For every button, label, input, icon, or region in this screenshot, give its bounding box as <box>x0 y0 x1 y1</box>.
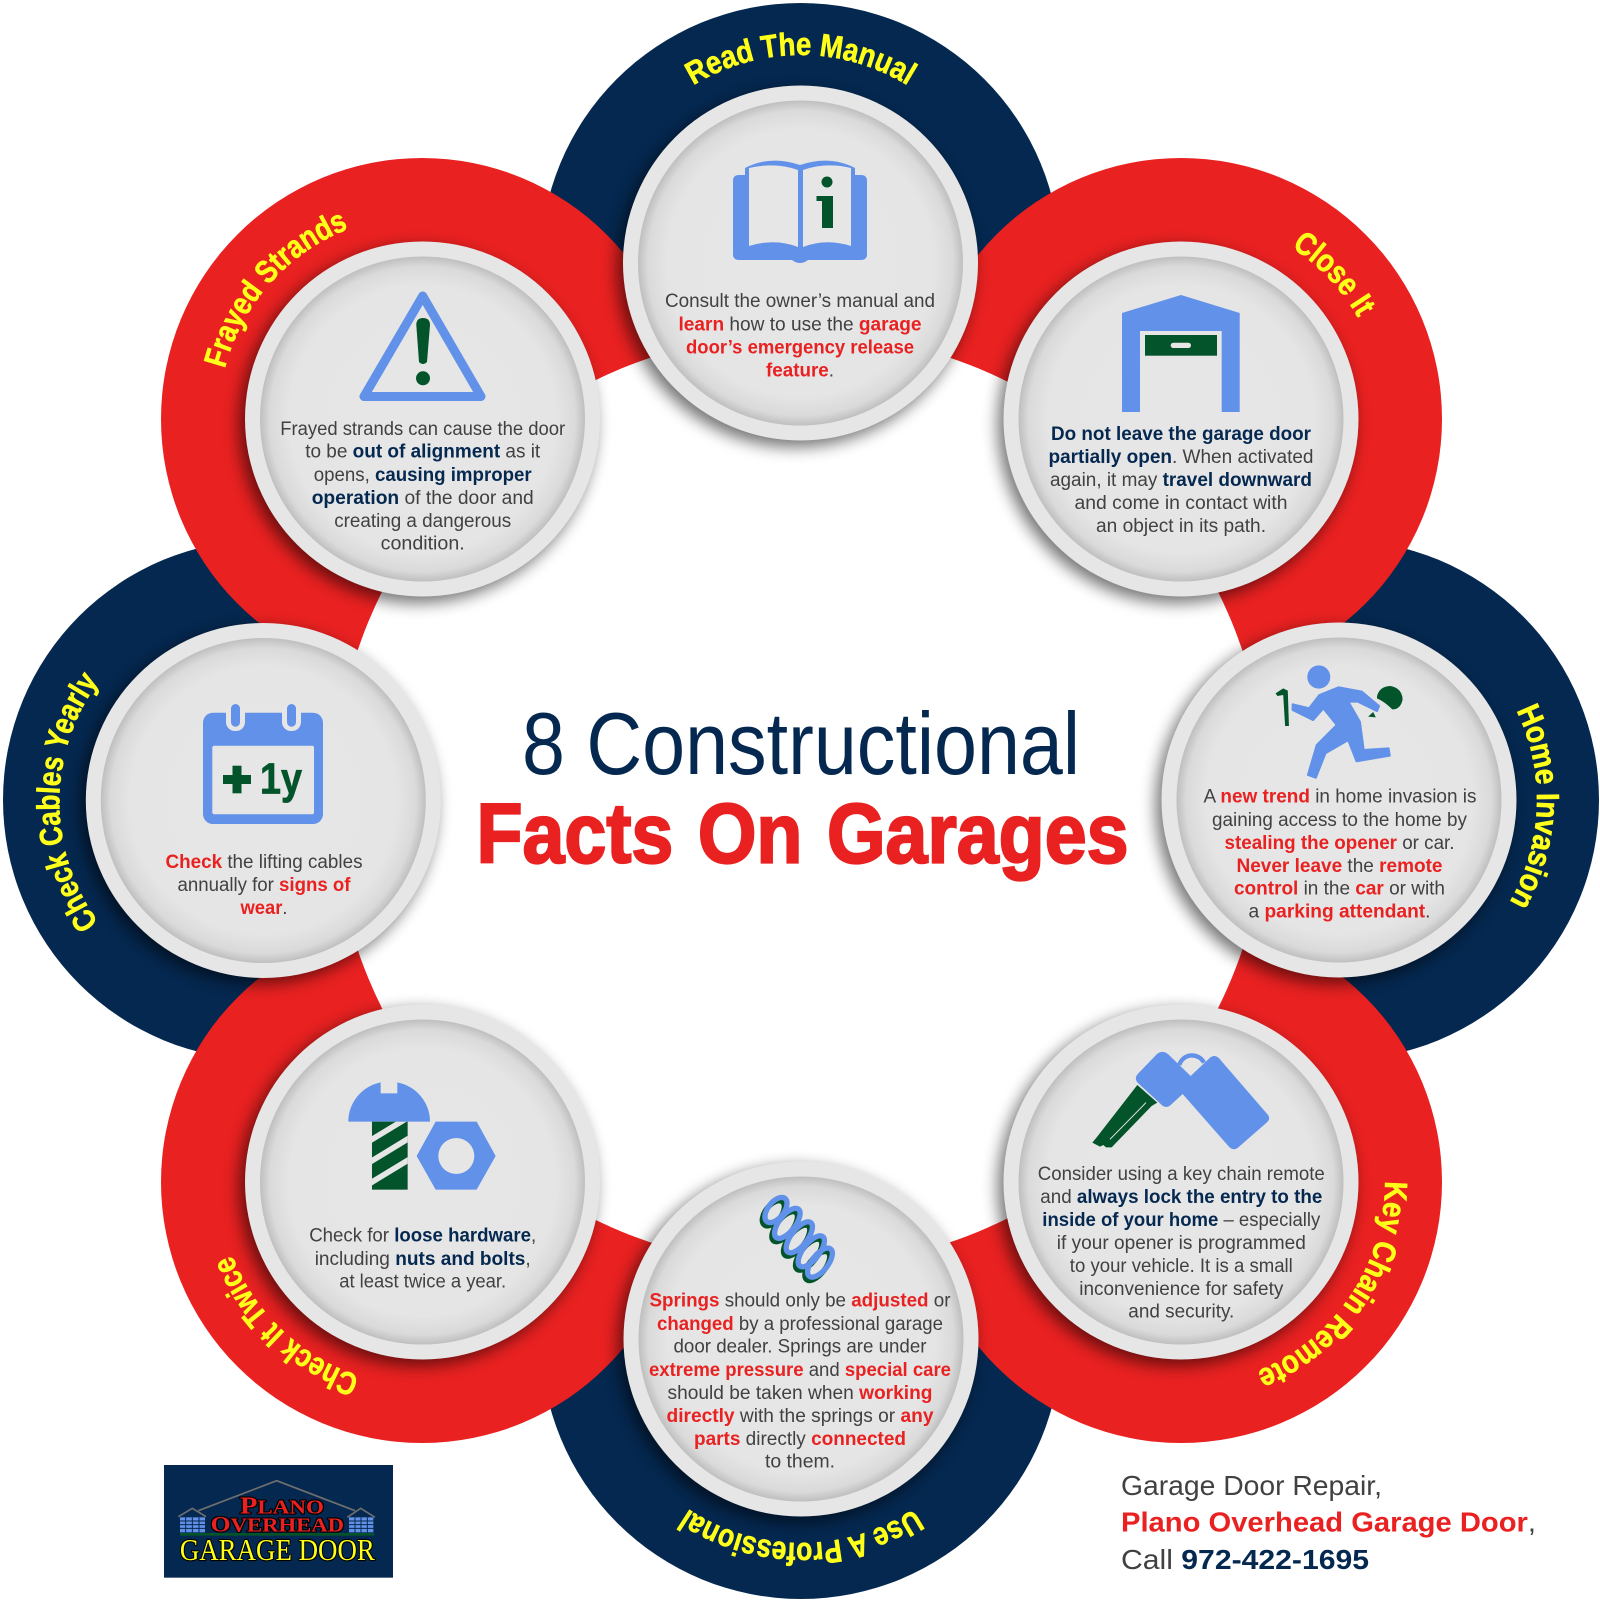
panel: close it <box>986 232 1375 614</box>
text: frayed strands: to be out of alignment as it <box>305 442 541 463</box>
label: Frayed Strands: Frayed Strands <box>204 214 346 368</box>
icon: warning triangle <box>364 296 481 396</box>
text: frayed strands: creating a dangerous <box>334 511 511 532</box>
panel: read the manual <box>606 32 984 458</box>
label: Home Invasion: Home Invasion <box>1510 702 1560 908</box>
logo: Plano Overhead Garage Door: OVERHEAD <box>211 1512 344 1537</box>
footer contact text: Plano Overhead Garage Door , <box>1121 1507 1536 1538</box>
text: key chain remote: inside of your home – especially <box>1042 1210 1321 1231</box>
text: frayed strands: Frayed strands can cause the door <box>280 419 566 440</box>
text: check it twice: at least twice a year. <box>339 1272 506 1293</box>
text: home invasion: gaining access to the home by <box>1212 810 1467 831</box>
text: use a professional: changed by a professional garage <box>657 1314 943 1335</box>
text: key chain remote: if your opener is programmed <box>1057 1233 1306 1254</box>
text: home invasion: stealing the opener or car. <box>1224 833 1454 854</box>
text: use a professional: door dealer. Springs are under <box>674 1337 927 1358</box>
text: use a professional: Springs should only be adjusted or <box>650 1291 951 1312</box>
text: close it <box>1048 424 1314 537</box>
text: close it: and come in contact with <box>1074 493 1288 514</box>
text: check it twice: including nuts and bolts, <box>315 1249 531 1270</box>
text: use a professional: extreme pressure and special care <box>649 1360 951 1381</box>
text: use a professional: directly with the springs or any <box>666 1406 934 1427</box>
panel: key chain remote <box>986 998 1408 1386</box>
label: Close It: Close It <box>1296 232 1375 318</box>
text: key chain remote: Consider using a key chain remote <box>1038 1164 1325 1185</box>
icon: coil spring <box>758 1194 837 1285</box>
text: check cables yearly: annually for signs of <box>178 875 351 896</box>
footer contact text: Garage Door Repair, <box>1121 1470 1382 1501</box>
text: home invasion: a parking attendant. <box>1248 902 1430 923</box>
logo: Plano Overhead Garage Door: PLANO <box>240 1492 324 1519</box>
title: Facts On Garages <box>476 787 1128 881</box>
text: close it: partially open. When activated <box>1048 447 1314 468</box>
icon: running burglar <box>1276 665 1403 778</box>
text: frayed strands: condition. <box>381 534 465 555</box>
text: check it twice: Check for loose hardware, <box>309 1226 536 1247</box>
footer contact text: Call 972-422-1695 <box>1121 1544 1369 1575</box>
text: frayed strands: operation of the door and <box>312 488 534 509</box>
text: home invasion: A new trend in home invasion is <box>1204 787 1476 808</box>
text: key chain remote: to your vehicle. It is a small <box>1070 1256 1293 1277</box>
text: close it: Do not leave the garage door <box>1051 424 1311 445</box>
panel: frayed strands <box>204 214 606 614</box>
label: Check Cables Yearly: Check Cables Yearly <box>36 672 99 931</box>
label: Key Chain Remote: Key Chain Remote <box>1259 1182 1408 1386</box>
text: home invasion <box>1204 787 1476 923</box>
icon: calendar plus one year <box>203 704 323 824</box>
label: Check It Twice: Check It Twice <box>218 1257 356 1395</box>
text: close it: an object in its path. <box>1096 516 1266 537</box>
icon: bolt and nut <box>348 1082 496 1190</box>
panel: check it twice <box>218 998 606 1395</box>
icon: key and fob <box>1092 1052 1269 1149</box>
panel: home invasion <box>1144 616 1560 996</box>
text: key chain remote <box>1038 1164 1325 1323</box>
text: check it twice <box>309 1226 536 1293</box>
text: home invasion: Never leave the remote <box>1236 856 1443 877</box>
text: use a professional: to them. <box>765 1452 835 1473</box>
text: read the manual: feature. <box>766 361 834 382</box>
text: read the manual: Consult the owner’s manual and <box>665 291 935 312</box>
text: read the manual: door’s emergency release <box>686 338 914 359</box>
text: frayed strands: opens, causing improper <box>314 465 532 486</box>
text: key chain remote: and always lock the entry to the <box>1040 1187 1323 1208</box>
panel: check cables yearly <box>36 616 448 996</box>
icon: garage <box>1122 295 1240 412</box>
footer contact text <box>1121 1470 1536 1575</box>
text: home invasion: control in the car or with <box>1234 879 1445 900</box>
label: Read The Manual: Read The Manual <box>684 32 918 85</box>
text: check cables yearly: Check the lifting cables <box>166 852 362 873</box>
text: read the manual <box>665 291 935 382</box>
text: close it: again, it may travel downward <box>1050 470 1312 491</box>
logo: Plano Overhead Garage Door <box>164 1465 393 1578</box>
icon: open book <box>733 161 867 263</box>
logo: Plano Overhead Garage Door: GARAGE DOOR <box>180 1533 375 1567</box>
text: key chain remote: inconvenience for safety <box>1079 1279 1284 1300</box>
title <box>476 694 1128 881</box>
text: check cables yearly <box>166 852 362 919</box>
panel: use a professional <box>606 1156 986 1566</box>
text: check cables yearly: wear. <box>240 898 288 919</box>
icon: calendar plus one year: 1y <box>260 754 302 803</box>
text: key chain remote: and security. <box>1128 1302 1234 1323</box>
text: use a professional: should be taken when working <box>668 1383 932 1404</box>
text: frayed strands <box>280 419 566 555</box>
text: read the manual: learn how to use the garage <box>678 315 922 336</box>
title: 8 Constructional <box>522 694 1080 793</box>
label: Use A Professional: Use A Professional <box>676 1509 925 1566</box>
text: use a professional: parts directly connected <box>694 1429 906 1450</box>
text: use a professional <box>649 1291 951 1473</box>
